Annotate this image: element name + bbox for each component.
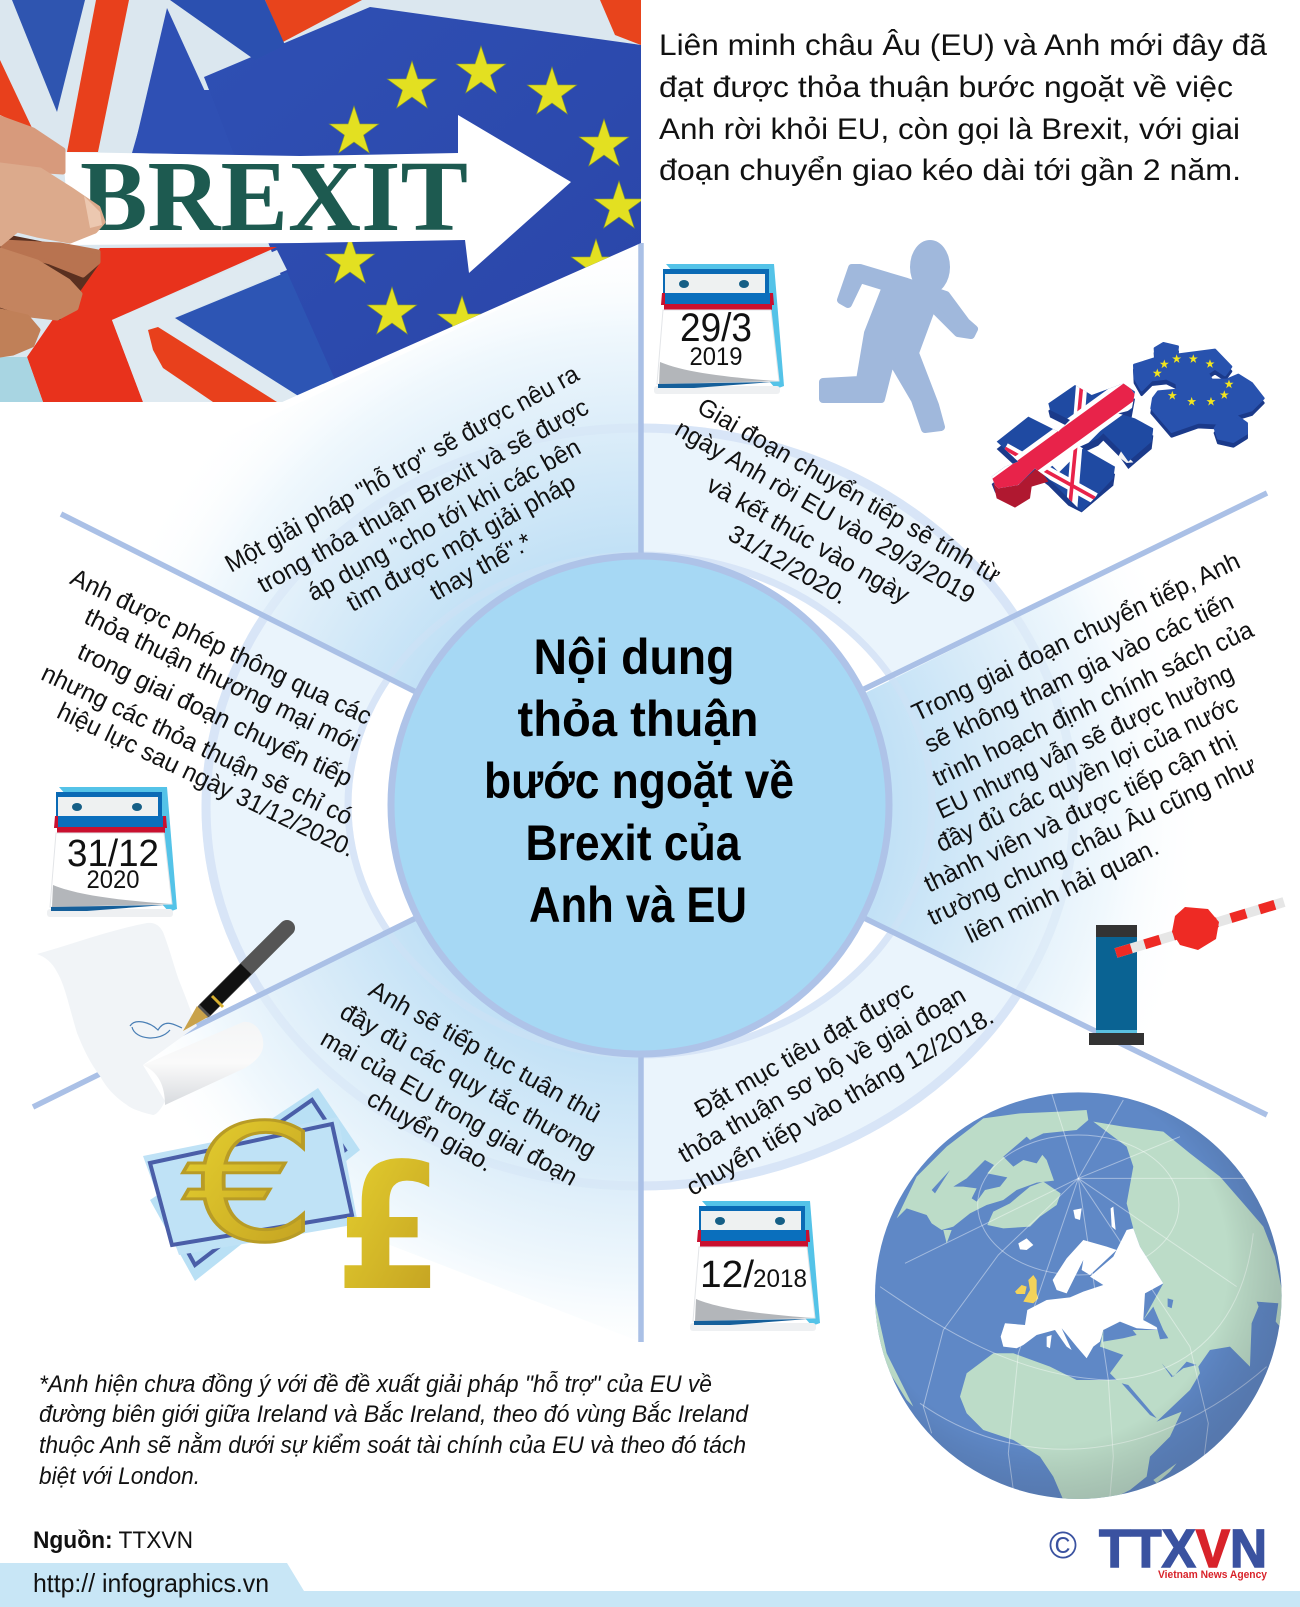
date text: 31/12 [67,833,159,875]
title: Nội dung [534,629,734,685]
text: transition period: Giai đoạn chuyển tiếp sẽ tính từ [693,393,1005,589]
text: single market: EU nhưng vẫn sẽ được hưởng [931,658,1238,825]
graticule [880,1093,1267,1497]
pound sign: £ [335,1127,443,1330]
text: EU trade rules: đầy đủ các quy tắc thương [335,997,601,1164]
footnote: *Anh hiện chưa đồng ý với đề đề xuất giải pháp "hỗ trợ" của EU về [39,1370,712,1398]
seas and lakes [932,1137,1278,1418]
icon: calendar 31/12/2020: 2020 [86,866,140,894]
text: December 2018 goal: thỏa thuận sơ bộ về giai đoạn [673,981,971,1169]
text: transition period: 31/12/2020. [723,520,853,610]
title: bước ngoặt về [484,753,794,809]
text: trade deals: nhưng các thỏa thuận sẽ chỉ có [37,659,357,831]
date text: 29/3 [680,306,752,350]
text: single market: trường chung châu Âu cũng như [923,750,1261,931]
text: backstop: áp dụng "cho tới khi các bên [303,433,585,607]
central circle [391,556,889,1054]
text: trade deals: hiệu lực sau ngày 31/12/2020. [53,697,359,863]
photo: Brexit arrow over flags [0,0,644,402]
icon: calendar 29/3/2019 [654,264,784,394]
icon: calendar 31/12/2020 [47,787,177,917]
title: thỏa thuận [518,691,758,747]
intro paragraph: Anh rời khỏi EU, còn gọi là Brexit, với giai [659,113,1240,146]
text: transition period: và kết thúc vào ngày [702,471,915,610]
icon: puzzle pieces [985,343,1263,515]
intro paragraph: Liên minh châu Âu (EU) và Anh mới đây đã [659,29,1267,62]
footnote: biệt với London. [39,1463,200,1490]
ring highlights over wedges [206,428,1074,1186]
icon: calendar 29/3/2019: 2019 [690,343,742,371]
United Kingdom and Ireland [1015,1275,1038,1303]
text: EU trade rules: Anh sẽ tiếp tục tuân thủ [364,975,606,1129]
inland seas [1103,1298,1173,1342]
icon: calendar 12/2018 [690,1201,820,1331]
text: single market: liên minh hải quan. [961,833,1163,949]
text: December 2018 goal: chuyển tiếp vào tháng 12/2018. [681,1002,999,1202]
text: transition period: ngày Anh rời EU vào 29/3/2019 [670,415,980,609]
spoke lines [33,243,1267,1342]
title: Brexit của [526,815,742,871]
footnote [39,1370,749,1490]
footnote: đường biên giới giữa Ireland và Bắc Ireland, theo đó vùng Bắc Ireland [39,1401,749,1428]
text: backstop: Một giải pháp "hỗ trợ" sẽ được nêu ra [220,359,584,578]
text: backstop: tìm được một giải pháp [342,468,580,618]
logo: TTXVN: © [1049,1525,1077,1567]
icon: border barrier [1089,902,1284,1045]
text: single market: trình hoạch định chính sách của [928,616,1258,792]
icon: globe [874,1092,1283,1500]
icon: banknotes and currency symbols [143,1088,443,1330]
intro paragraph: đạt được thỏa thuận bước ngoặt về việc [659,71,1233,104]
logo: TTXVN: TTXVN [1099,1519,1267,1579]
title [484,629,794,933]
photo: Brexit arrow over flags: BREXIT [80,140,468,252]
intro paragraph [659,29,1267,187]
intro paragraph: đoạn chuyển giao kéo dài tới gần 2 năm. [659,154,1241,187]
logo: TTXVN: Vietnam News Agency [1158,1569,1268,1581]
text: single market: đầy đủ các quyền lợi của nước [932,690,1242,858]
source: Nguồn: TTXVN [33,1527,193,1554]
text: single market: sẽ không tham gia vào các tiến [920,587,1238,759]
icon: calendar 12/2018: 2018 [753,1265,807,1293]
land masses [874,1110,1283,1500]
UK puzzle piece [992,384,1154,512]
text: backstop: trong thỏa thuận Brexit và sẽ được [253,393,593,599]
Europe [1001,1207,1163,1358]
text: single market [908,547,1261,949]
text: EU trade rules: mại của EU trong giai đoạn [316,1024,582,1192]
text: trade deals: trong giai đoạn chuyển tiếp [73,638,357,792]
panel: shaded wedges [33,243,1267,1342]
text: single market: Trong giai đoạn chuyển tiếp, Anh [908,547,1244,727]
website: http:// infographics.vn [33,1568,269,1598]
text: trade deals [37,563,376,863]
text: EU trade rules: chuyển giao. [362,1084,498,1178]
hand [0,118,103,355]
EU puzzle piece [1134,343,1263,446]
date text: 12/ [700,1254,754,1296]
footnote: thuộc Anh sẽ nằm dưới sự kiểm soát tài chính của EU và theo đó tách [39,1432,746,1459]
title: Anh và EU [529,877,747,933]
text: single market: thành viên và được tiếp cận thị [920,726,1240,898]
text: trade deals: Anh được phép thông qua các [66,563,376,731]
footer band [0,1563,1300,1607]
text: trade deals: thỏa thuận thương mại mới [80,603,364,757]
text: backstop: thay thế".* [425,527,537,606]
background ring [206,428,1074,1186]
euro sign: € [183,1091,317,1279]
icon: running figure [823,240,974,429]
text: December 2018 goal: Đặt mục tiêu đạt được [690,976,918,1124]
icon: signed paper and pen [37,923,287,1115]
